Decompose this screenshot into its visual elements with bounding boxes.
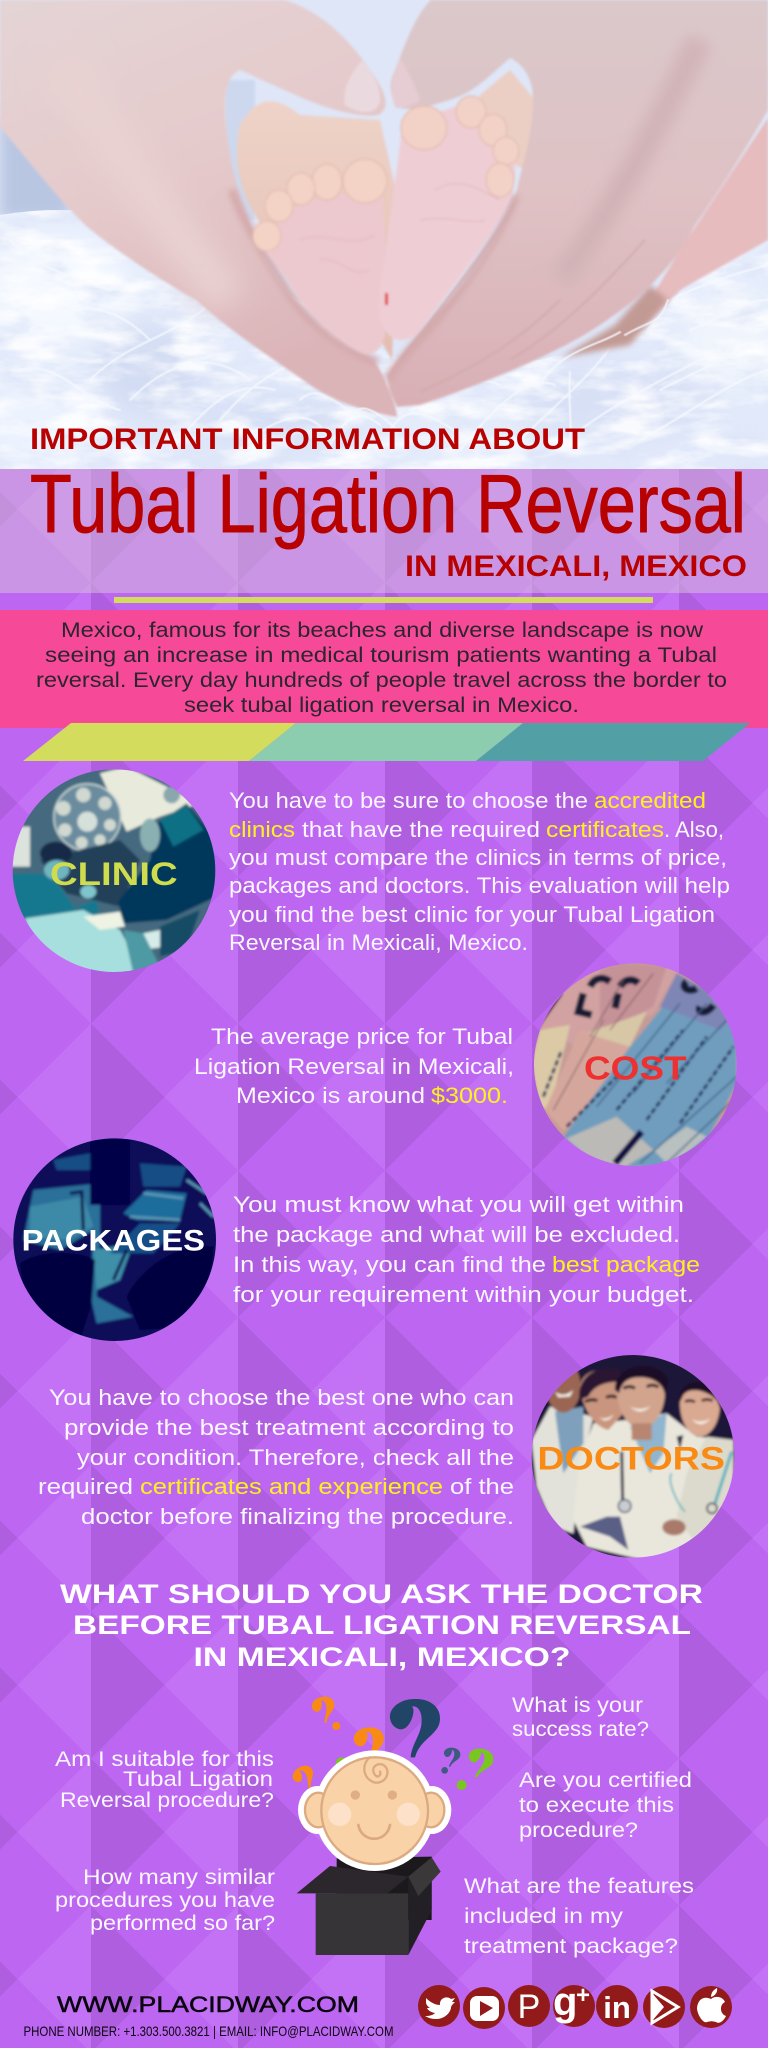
clinic photo circle bbox=[10, 767, 220, 977]
packages paragraph bbox=[233, 1192, 700, 1307]
hero photo: baby feet in heart-shaped hands bbox=[0, 0, 768, 469]
icon: linkedin bbox=[596, 1985, 638, 2027]
question: features: included in my bbox=[464, 1905, 624, 1928]
icon: google plus: g bbox=[553, 1980, 577, 2024]
question: certified: Are you certified bbox=[519, 1769, 692, 1792]
icon: pinterest: P bbox=[518, 1988, 540, 2026]
sole creases bbox=[300, 184, 500, 272]
questions heading: BEFORE TUBAL LIGATION REVERSAL bbox=[73, 1610, 691, 1640]
clinic paragraph: . Also, bbox=[664, 817, 724, 842]
question: certified: procedure? bbox=[519, 1819, 638, 1842]
clinic paragraph: accredited bbox=[594, 788, 706, 813]
question: suitable: Reversal procedure? bbox=[60, 1789, 274, 1812]
social icons bbox=[418, 1980, 732, 2029]
right foot bbox=[379, 105, 515, 340]
doctors paragraph: You have to choose the best one who can bbox=[49, 1385, 514, 1410]
clinic paragraph bbox=[229, 788, 730, 955]
clinic paragraph: Reversal in Mexicali, Mexico. bbox=[229, 930, 528, 955]
question: success rate: What is your bbox=[512, 1694, 643, 1717]
cost paragraph: Ligation Reversal in Mexicali, bbox=[194, 1054, 514, 1079]
questions heading: IN MEXICALI, MEXICO? bbox=[194, 1642, 570, 1672]
clinic paragraph: that have the required bbox=[302, 817, 540, 842]
doctors label: DOCTORS bbox=[537, 1440, 725, 1476]
icon: pinterest bbox=[508, 1985, 550, 2027]
cost paragraph bbox=[194, 1024, 514, 1108]
cost paragraph: $3000. bbox=[431, 1083, 508, 1108]
packages photo circle bbox=[10, 1135, 220, 1345]
question: features: treatment package? bbox=[464, 1935, 678, 1958]
icon: twitter bbox=[418, 1985, 460, 2027]
footer contact details: PHONE NUMBER: +1.303.500.3821 | EMAIL: INFO@PLACIDWAY.COM bbox=[24, 2023, 394, 2039]
packages paragraph: for your requirement within your budget. bbox=[233, 1282, 694, 1307]
right hand bbox=[388, 0, 768, 407]
intro text: seek tubal ligation reversal in Mexico. bbox=[184, 694, 579, 717]
packages paragraph: the package and what will be excluded. bbox=[233, 1222, 680, 1247]
icon: baby head bbox=[298, 1750, 451, 1871]
doctors paragraph bbox=[38, 1385, 514, 1529]
doctors paragraph: your condition. Therefore, check all the bbox=[77, 1445, 514, 1470]
question: certified bbox=[519, 1769, 692, 1842]
cost label: COST bbox=[584, 1050, 687, 1087]
question: features bbox=[464, 1875, 694, 1958]
question: suitable: Am I suitable for this bbox=[55, 1748, 274, 1771]
clinic paragraph: packages and doctors. This evaluation will help bbox=[229, 873, 730, 898]
question: how many bbox=[55, 1866, 275, 1935]
question: certified: to execute this bbox=[519, 1794, 674, 1817]
packages paragraph: best package bbox=[552, 1252, 700, 1277]
doctors paragraph: of the bbox=[450, 1474, 514, 1499]
intro text: Mexico, famous for its beaches and diverse landscape is now bbox=[61, 619, 704, 642]
doctors paragraph: provide the best treatment according to bbox=[64, 1415, 514, 1440]
intro text: reversal. Every day hundreds of people travel across the border to bbox=[36, 669, 727, 692]
icon: linkedin: in bbox=[603, 1990, 631, 2025]
icon: question marks bbox=[290, 1695, 495, 1794]
left hand bbox=[0, 0, 397, 417]
title band bbox=[0, 469, 768, 593]
doctors paragraph: certificates and experience bbox=[140, 1474, 443, 1499]
clinic paragraph: You have to be sure to choose the bbox=[229, 788, 588, 813]
icon: open box bbox=[297, 1857, 441, 1955]
cost paragraph: Mexico is around bbox=[236, 1083, 425, 1108]
questions heading: WHAT SHOULD YOU ASK THE DOCTOR bbox=[60, 1579, 703, 1609]
question: how many: procedures you have bbox=[55, 1889, 275, 1912]
nails and creases bbox=[344, 60, 380, 112]
clinic paragraph: clinics bbox=[229, 817, 295, 842]
left foot bbox=[262, 190, 386, 354]
question: suitable bbox=[55, 1748, 274, 1812]
icon: google plus bbox=[553, 1980, 595, 2027]
question: how many: performed so far? bbox=[90, 1912, 275, 1935]
footer website: WWW.PLACIDWAY.COM bbox=[57, 1992, 359, 2017]
clinic paragraph: certificates bbox=[546, 817, 664, 842]
question: success rate: success rate? bbox=[512, 1718, 649, 1741]
packages label: PACKAGES bbox=[22, 1225, 205, 1258]
icon: youtube bbox=[463, 1987, 505, 2029]
question: success rate bbox=[512, 1694, 649, 1741]
question: how many: How many similar bbox=[83, 1866, 275, 1889]
doctors paragraph: required bbox=[38, 1474, 133, 1499]
icon: thinking baby in box bbox=[290, 1695, 495, 1955]
doctors photo circle bbox=[530, 1353, 737, 1560]
cost photo circle bbox=[530, 960, 743, 1173]
title: in mexicali, mexico: IN MEXICALI, MEXICO bbox=[405, 550, 747, 583]
icon: google play bbox=[643, 1986, 685, 2028]
title: important information about: IMPORTANT INFORMATION ABOUT bbox=[30, 423, 585, 456]
questions heading bbox=[60, 1579, 703, 1672]
question: features: What are the features bbox=[464, 1875, 694, 1898]
clinic paragraph: you find the best clinic for your Tubal Ligation bbox=[229, 902, 715, 927]
yellow divider bbox=[114, 597, 653, 603]
intro text: seeing an increase in medical tourism patients wanting a Tubal bbox=[45, 644, 717, 667]
hand shading bbox=[232, 190, 378, 362]
clinic paragraph: you must compare the clinics in terms of price, bbox=[229, 845, 727, 870]
intro band bbox=[0, 610, 768, 728]
intro text bbox=[36, 619, 727, 717]
cost paragraph: The average price for Tubal bbox=[211, 1024, 513, 1049]
icon: google plus: + bbox=[576, 1982, 590, 2009]
icon: apple bbox=[690, 1986, 732, 2028]
packages paragraph: You must know what you will get within bbox=[233, 1192, 684, 1217]
tri-colour ribbon bbox=[23, 723, 750, 761]
packages paragraph: In this way, you can find the bbox=[233, 1252, 546, 1277]
question: suitable: Tubal Ligation bbox=[123, 1768, 273, 1791]
baby legs behind bbox=[237, 101, 398, 360]
doctors paragraph: doctor before finalizing the procedure. bbox=[81, 1504, 514, 1529]
clinic label: CLINIC bbox=[50, 856, 178, 892]
